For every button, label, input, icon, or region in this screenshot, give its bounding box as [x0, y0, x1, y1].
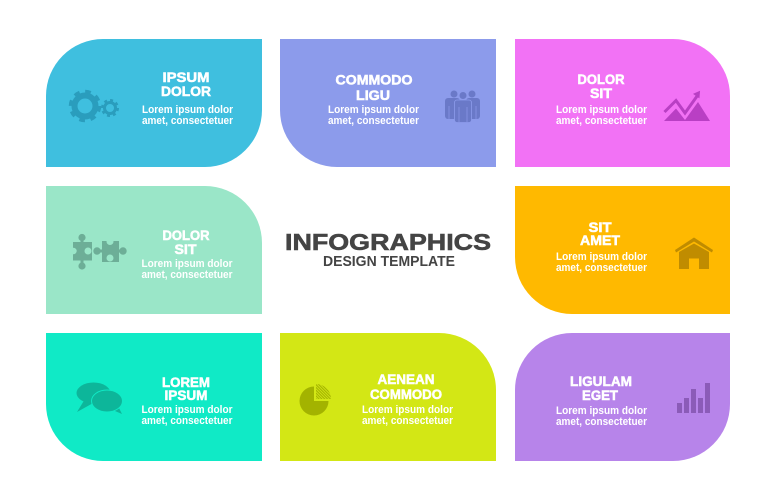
panel shape: [515, 333, 730, 461]
body text: amet, consectetuer: [142, 269, 233, 281]
heading: [161, 69, 211, 99]
main title: INFOGRAPHICS: [285, 229, 491, 255]
panel shape: [46, 39, 262, 167]
panel: dolor sit top: [515, 39, 730, 167]
body text: amet, consectetuer: [362, 415, 454, 427]
heading: SIT: [174, 241, 197, 257]
body text: [328, 104, 420, 127]
body text: Lorem ipsum dolor: [556, 251, 648, 263]
heading: LOREM: [162, 374, 210, 390]
body text: amet, consectetuer: [328, 115, 420, 127]
icon: team of people: [445, 90, 480, 122]
heading: [578, 71, 624, 101]
panel: commodo ligu: [280, 39, 496, 167]
panel shape: [280, 333, 496, 461]
heading: [570, 373, 632, 403]
heading: SIT: [590, 85, 612, 101]
heading: [580, 219, 620, 248]
body text: amet, consectetuer: [556, 262, 648, 274]
heading: COMMODO: [336, 72, 413, 88]
body text: [142, 258, 233, 281]
body text: [556, 251, 648, 274]
heading: LIGULAM: [570, 373, 632, 389]
subtitle: DESIGN TEMPLATE: [323, 253, 455, 270]
icon: puzzle pieces: [70, 234, 127, 270]
heading: [336, 72, 413, 103]
heading: DOLOR: [162, 227, 210, 243]
panel: lorem ipsum: [46, 333, 262, 461]
body text: Lorem ipsum dolor: [328, 104, 420, 116]
heading: [370, 371, 442, 402]
panel shape: [515, 186, 730, 314]
icon: bar chart: [677, 383, 710, 413]
body text: [142, 404, 233, 427]
heading: EGET: [582, 387, 618, 403]
panel shape: [280, 39, 496, 167]
heading: IPSUM: [162, 69, 210, 85]
body text: [556, 104, 648, 127]
icon: pie chart: [300, 384, 331, 416]
body text: Lorem ipsum dolor: [556, 104, 648, 116]
icon: house: [675, 238, 713, 269]
icon: gears: [70, 92, 118, 120]
body text: amet, consectetuer: [142, 415, 233, 427]
heading: AENEAN: [378, 371, 434, 387]
body text: amet, consectetuer: [556, 416, 648, 428]
body text: [362, 404, 454, 427]
heading: LIGU: [356, 87, 390, 103]
heading: IPSUM: [164, 387, 208, 403]
center title: [285, 229, 491, 270]
heading: DOLOR: [161, 83, 211, 99]
body text: Lorem ipsum dolor: [142, 104, 234, 116]
heading: [162, 374, 210, 403]
icon: speech bubbles: [76, 382, 122, 414]
panel: aenean commodo: [280, 333, 496, 461]
body text: Lorem ipsum dolor: [556, 405, 648, 417]
body text: Lorem ipsum dolor: [142, 404, 233, 416]
body text: Lorem ipsum dolor: [142, 258, 233, 270]
icon: mountain chart with arrow: [664, 92, 710, 121]
heading: DOLOR: [578, 71, 624, 87]
panel: ipsum dolor: [46, 39, 262, 167]
panel: sit amet: [515, 186, 730, 314]
body text: [142, 104, 234, 127]
panel shape: [46, 333, 262, 461]
body text: amet, consectetuer: [142, 115, 234, 127]
panel: ligulam eget: [515, 333, 730, 461]
heading: COMMODO: [370, 386, 442, 402]
panel: dolor sit puzzle: [46, 186, 262, 314]
panel shape: [46, 186, 262, 314]
heading: SIT: [588, 219, 612, 235]
body text: amet, consectetuer: [556, 115, 648, 127]
panel shape: [515, 39, 730, 167]
body text: [556, 405, 648, 428]
body text: Lorem ipsum dolor: [362, 404, 454, 416]
heading: [162, 227, 210, 257]
heading: AMET: [580, 232, 620, 248]
